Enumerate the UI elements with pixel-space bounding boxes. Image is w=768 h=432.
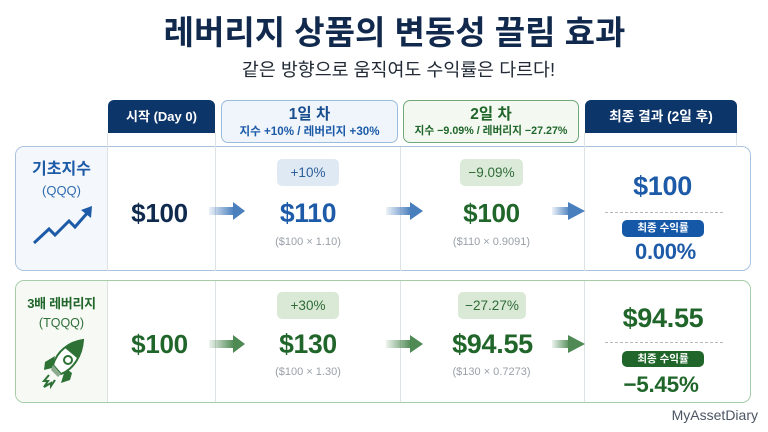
icon: rising chart [33,206,92,244]
label: QQQ [32,160,91,198]
header: day 2: 지수 −9.09% / 레버리지 −27.27% [415,125,567,137]
value: TQQQ day 1: $130 [279,329,337,359]
value: QQQ start: $100 [131,198,188,228]
badge: -9.09% [460,159,523,186]
return label: 최종 수익률 [637,353,689,365]
header: start: 시작 (Day 0) [126,109,197,124]
return label [622,220,704,237]
return value: 0.00% [635,239,696,264]
subtitle: 같은 방향으로 움직여도 수익률은 다르다! [242,59,555,80]
value: QQQ day 1: $110 [280,198,336,228]
header: final result [585,100,737,133]
badge: -27.27%: −27.27% [465,298,519,313]
arrow [552,202,585,220]
header: start [108,100,215,133]
badge: -9.09%: −9.09% [468,165,515,180]
arrow [209,335,245,353]
final value: $94.55 [623,303,703,333]
badge: +30% [277,292,339,319]
arrow [209,202,245,220]
panel: index row [15,146,751,271]
badge: +30%: +30% [291,298,325,313]
final value: $100 [633,171,692,201]
value: TQQQ start: $100 [131,329,188,359]
value: TQQQ day 2: $94.55 [452,329,533,359]
row label background [16,281,108,402]
title: 레버리지 상품의 변동성 끌림 효과 [164,14,625,51]
badge: +10% [277,159,339,186]
label: QQQ: 기초지수 [32,161,91,178]
icon: rocket [42,338,84,390]
formula: ($110 × 0.9091) [453,236,530,248]
row label background [16,147,108,270]
label: TQQQ: (TQQQ) [39,316,84,330]
final: TQQQ [605,303,723,397]
header: day 1 [221,100,398,143]
badge: +10%: +10% [291,165,325,180]
arrow [386,202,423,220]
badge: -27.27% [458,292,526,319]
label: TQQQ [27,296,96,330]
arrow [386,335,423,353]
watermark: MyAssetDiary [672,407,758,423]
arrow [552,335,585,353]
header: day 2 [403,100,579,143]
formula: ($130 × 0.7273) [452,366,530,378]
value: QQQ day 2: $100 [463,198,520,228]
label: QQQ: (QQQ) [42,183,81,198]
header: day 1: 지수 +10% / 레버리지 +30% [239,125,380,138]
formula: ($100 × 1.30) [275,366,341,378]
return label: 최종 수익률 [637,222,689,234]
header: day 1: 1일 차 [289,106,330,123]
dashed divider [605,342,723,343]
panel: leverage row [15,280,751,403]
formula: ($100 × 1.10) [275,236,341,248]
header: final result: 최종 결과 (2일 후) [609,109,713,124]
dashed divider [605,212,723,213]
return value: −5.45% [623,372,699,397]
label: TQQQ: 3배 레버리지 [27,296,96,311]
final: QQQ [605,171,723,264]
return label [622,351,704,367]
header: day 2: 2일 차 [470,106,512,123]
